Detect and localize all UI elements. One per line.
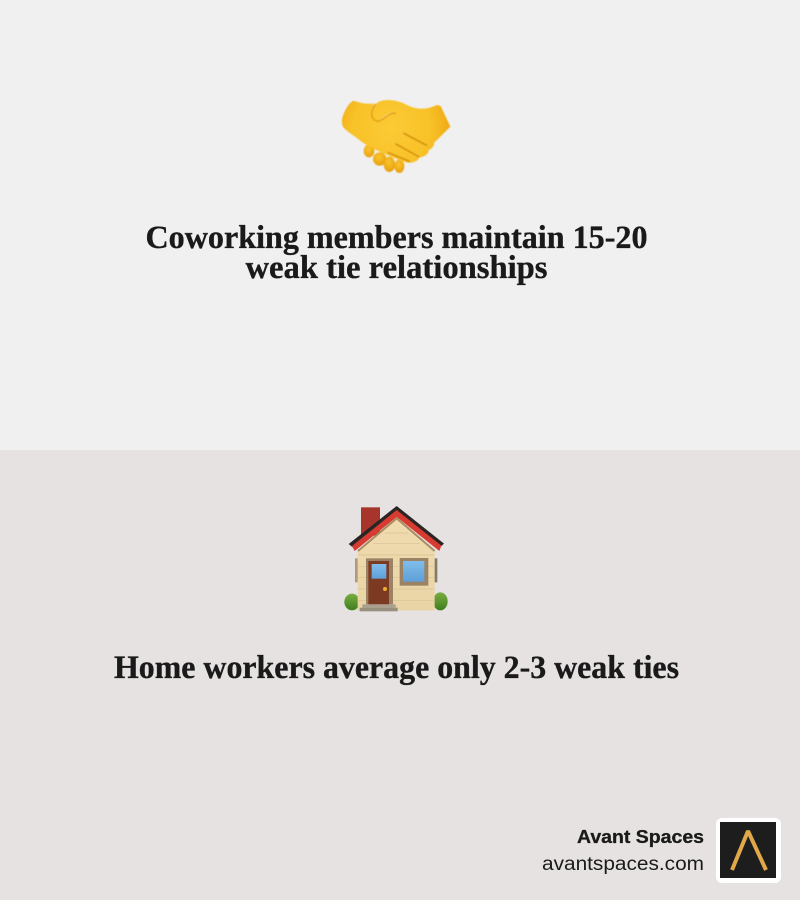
fingers [364,145,404,173]
shutters [355,558,358,582]
website: avantspaces.com [542,854,704,875]
roof [349,506,444,548]
heading: coworking: weak tie relationships [246,250,548,286]
heading: home workers: Home workers average only 2-3 weak ties [114,650,679,686]
right arm [372,100,450,142]
walls [358,517,435,610]
branding: Avant Spaces [542,818,781,883]
finger creases [388,133,427,161]
heading: coworking [146,220,648,286]
logo [716,818,781,883]
door [366,558,393,604]
heading: coworking: Coworking members maintain 15-20 [146,220,648,256]
bushes [344,594,360,610]
eave shadow [358,518,435,551]
icon: house [344,506,448,611]
steps [362,604,396,608]
left hand [342,101,434,163]
brand name: Avant Spaces [577,827,704,847]
panel: home workers [0,450,800,900]
thumb edge [372,104,396,121]
window [400,558,428,586]
chimney [361,507,380,536]
icon: handshake [342,100,450,173]
panel: coworking [0,0,800,450]
